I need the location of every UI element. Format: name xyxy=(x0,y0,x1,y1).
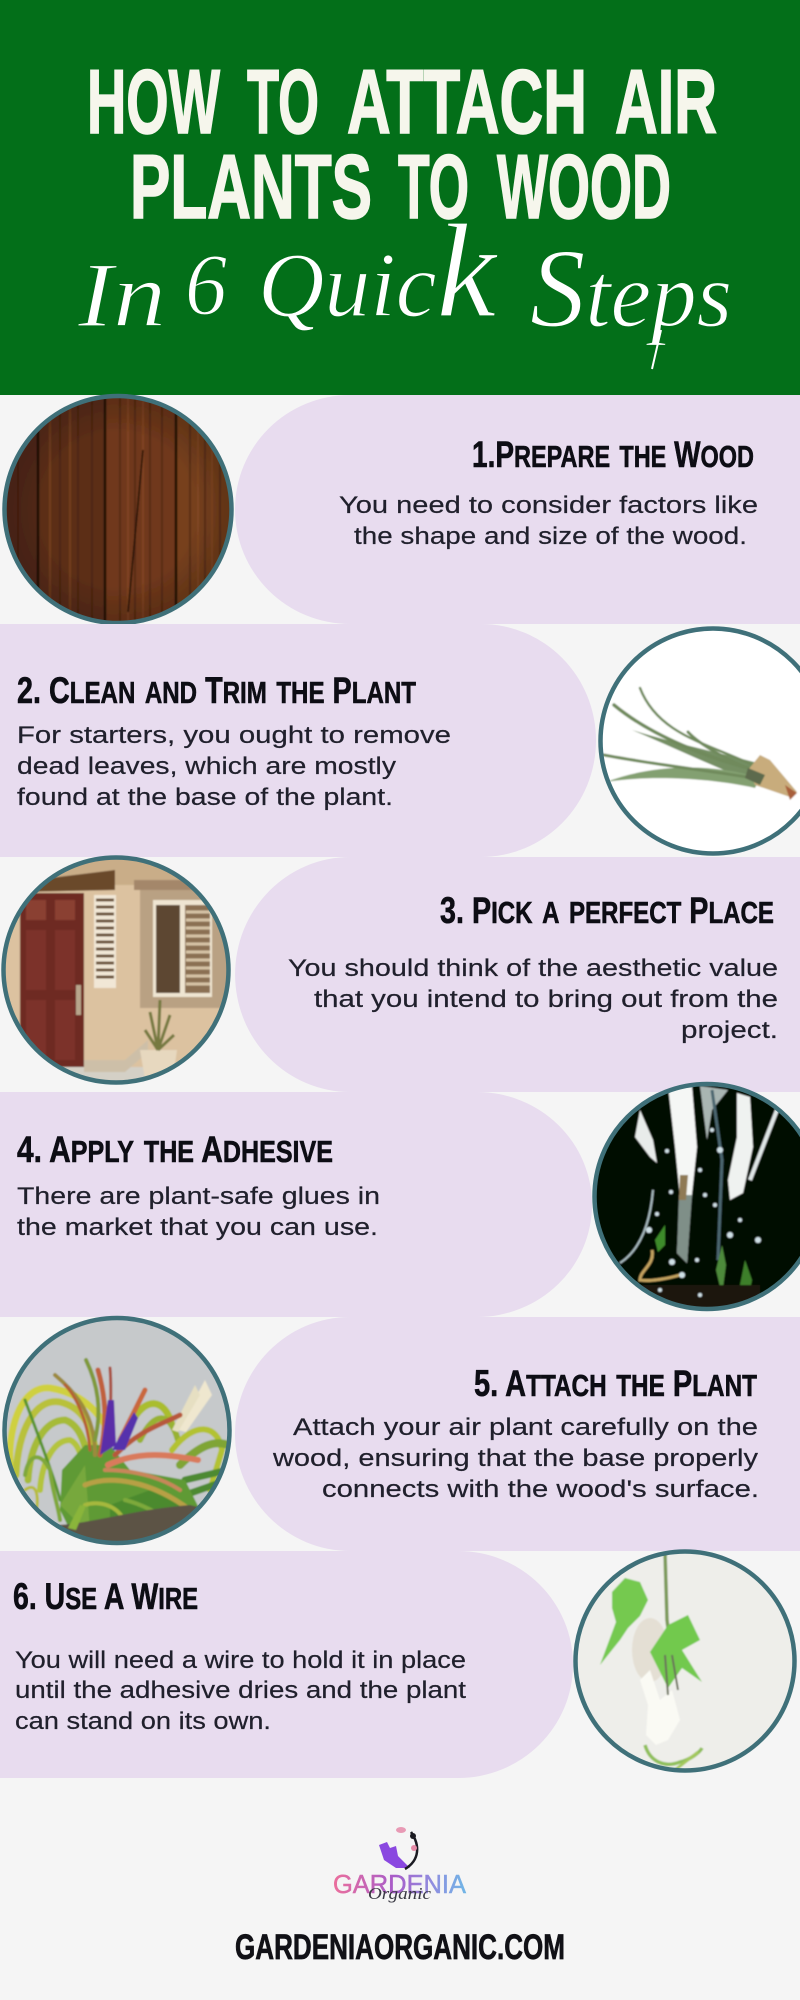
step 3 heading: 3. Pick a perfect Place xyxy=(440,884,774,933)
title line 1: HOW xyxy=(87,52,220,153)
step 4 heading: 4. Apply the Adhesive xyxy=(17,1123,333,1172)
title line 2: WOOD xyxy=(497,137,671,238)
step 4 text xyxy=(17,1183,380,1241)
step 3 text: project. xyxy=(681,1017,778,1044)
logo script: Organic xyxy=(368,1884,432,1903)
step 6 text: until the adhesive dries and the plant xyxy=(15,1677,466,1704)
script subtitle: Quick xyxy=(258,197,499,345)
script subtitle: Steps xyxy=(530,227,732,351)
step 4 photo: glue xyxy=(590,1080,800,1315)
brand logo xyxy=(333,1827,467,1903)
step 2 text: found at the base of the plant. xyxy=(17,784,393,811)
step 1 photo: wood planks xyxy=(0,392,240,628)
step 3 text: that you intend to bring out from the xyxy=(314,986,778,1013)
step 5 text: Attach your air plant carefully on the xyxy=(293,1414,758,1441)
step 3 text: You should think of the aesthetic value xyxy=(288,955,778,982)
step 2 text: dead leaves, which are mostly xyxy=(17,753,397,780)
step 2 photo: air plant xyxy=(595,625,800,860)
step 5 photo: flowering air plant xyxy=(0,1314,235,1549)
step 4 text: There are plant-safe glues in xyxy=(17,1183,380,1210)
step 2 panel xyxy=(0,624,596,857)
title line 2 xyxy=(130,137,671,238)
script subtitle: In xyxy=(77,244,166,346)
title line 1: ATTACH xyxy=(347,52,587,153)
step 1 text xyxy=(339,492,758,550)
step 6 text: You will need a wire to hold it in place xyxy=(15,1647,466,1674)
step 1 text: You need to consider factors like xyxy=(339,492,758,519)
step 5 text: wood, ensuring that the base properly xyxy=(272,1445,759,1472)
step 1 heading: 1.Prepare the Wood xyxy=(472,428,754,477)
step 6 photo: hanging vine xyxy=(572,1548,798,1776)
title line 1: AIR xyxy=(615,52,717,153)
step 6 text: can stand on its own. xyxy=(15,1708,271,1735)
step 1 text: the shape and size of the wood. xyxy=(354,523,747,550)
header banner xyxy=(0,0,800,395)
step 5 heading: 5. Attach the Plant xyxy=(474,1357,757,1406)
step 3 panel xyxy=(235,857,800,1092)
step 4 panel xyxy=(0,1092,592,1317)
title line 1 xyxy=(87,52,717,153)
step 6 panel xyxy=(0,1551,573,1778)
website url: GARDENIAORGANIC.COM xyxy=(235,1928,565,1967)
step 3 photo: front door xyxy=(0,855,235,1087)
step 2 heading: 2. Clean and Trim the Plant xyxy=(17,664,416,713)
title line 2: TO xyxy=(398,137,469,238)
title line 2: PLANTS xyxy=(130,137,372,238)
step 2 text: For starters, you ought to remove xyxy=(17,722,451,749)
script subtitle xyxy=(77,197,732,369)
step 5 text xyxy=(272,1414,759,1503)
step 6 heading: 6. Use A Wire xyxy=(13,1570,198,1619)
logo emblem xyxy=(379,1827,417,1869)
step 6 text xyxy=(15,1647,466,1735)
step 3 text xyxy=(288,955,778,1044)
script subtitle: 6 xyxy=(185,237,227,334)
step 4 text: the market that you can use. xyxy=(17,1214,378,1241)
step 1 panel xyxy=(235,395,800,624)
title line 1: TO xyxy=(247,52,319,153)
logo wordmark: GARDENIA xyxy=(333,1869,467,1899)
step 2 text xyxy=(17,722,451,811)
step 5 text: connects with the wood's surface. xyxy=(322,1476,759,1503)
step 5 panel xyxy=(235,1317,800,1551)
